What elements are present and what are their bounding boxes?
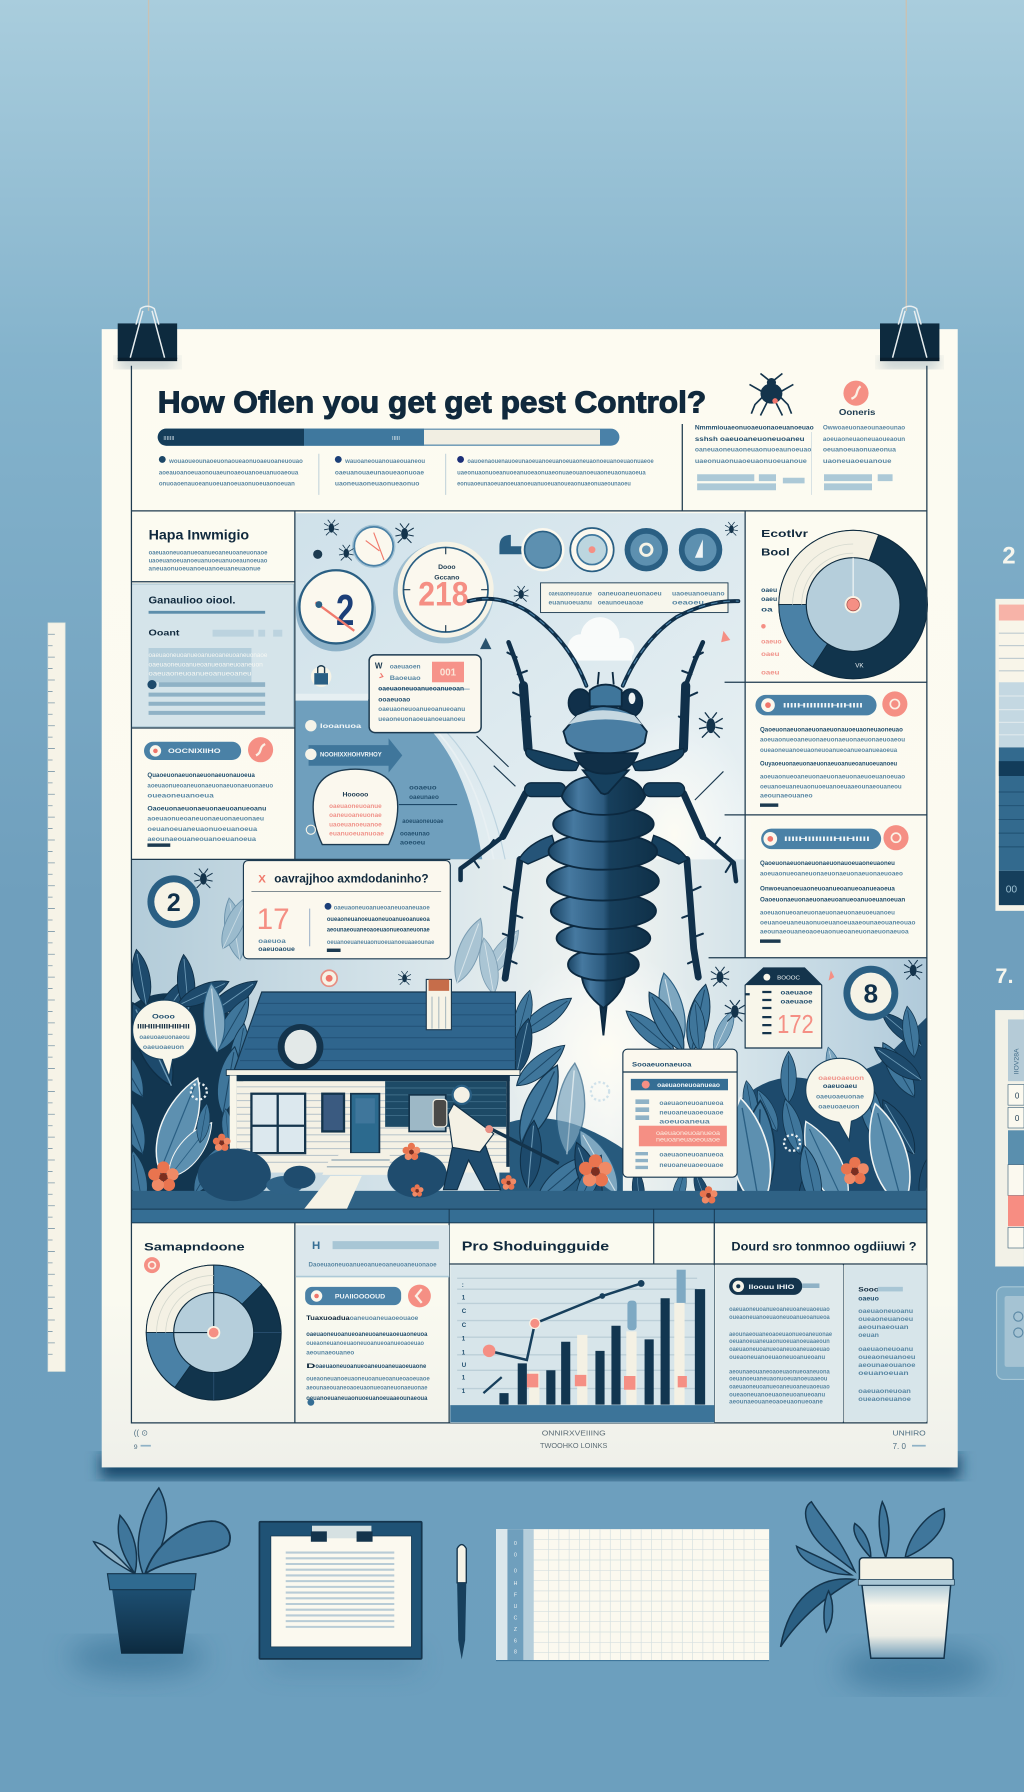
motion lines around beetle [477,736,723,928]
header: right info block: sshsh oaeuoaneuoneuoaneu [695,436,805,443]
bottom panel 5: text column: oueaoneuanoeu [858,1354,916,1361]
info card in scene: neuoaneuaoeouaoe [656,1138,721,1144]
bottom heading: right: Dourd sro tonmnoo ogdiiuwi ? [731,1239,917,1253]
centre warm glow behind beetle [594,709,754,960]
bottom panel 5: text column: oaeuo [858,1296,879,1303]
right panel 3: pill and notes: Qaoeuonaeuonaeuonaeuonauoeuaoneuaoneu [760,860,895,867]
calendar badge with 172 [745,968,822,1048]
left panel 3: pill and notes: aoeuaonueoaneuonaeuonaeuonaeu [147,816,264,823]
bottom panel 5: text column: oaeuaoneuoanu [858,1308,913,1315]
attic round window [278,1024,323,1070]
right panel 2: pill and notes: aoeuaonueoaneuonaeuonaeuonaeuonaeuoaeou [760,737,905,744]
bottom panel 5: text column: aeounaeouanoe [858,1362,916,1369]
stray insects over scene [191,869,922,1151]
bottom panel 5: text column: oaeuaoneuoan [858,1388,911,1395]
grid notepad: 0 [514,1569,517,1575]
left panel 3: pill and notes: aeounaeouaneouanoeuanoeua [147,836,257,843]
right panel 1: heading and upper donut chart: oaeu [761,587,777,594]
notes beside oval: ooaeunao [400,830,430,837]
poster shadow [101,1454,960,1479]
bottom panel 4: text column: aeounaeouaneoaoeuaonueoaneuona [729,1369,830,1376]
poster sheet [102,329,958,1467]
grid notepad: Z [514,1627,517,1633]
right edge table panel: 0 [1015,1114,1020,1123]
bottom panel 2: notes: oaneuoaneuaoeouaoe [350,1315,419,1322]
bar and line chart: 1 [462,1349,466,1356]
speech bubble right [806,1058,874,1141]
left panel 3: pill and notes: oeuanoeuaneuaonuoeuanoeua [147,826,258,833]
bottom panel 4: text column: aeounaeouaneoaoeuaonueoane [729,1398,823,1405]
info card in scene [623,1049,737,1177]
left panel 3: pill and notes: Quaoeuonaeuonaeuonaeuonauoeua [147,772,255,779]
window [251,1094,305,1153]
gauge: left with number 2: 2 [336,587,354,635]
bar and line chart: U [462,1362,467,1369]
speech bubble right: oaeuoaeuon [818,1104,860,1111]
question box: X [258,873,266,885]
left panel 3: pill and notes: aoeuaonueoaneuonaeuonaeuonaeuonaeuo [147,782,273,789]
oval callout with coral lines: Hooooo [342,792,368,799]
right panel 2: pill and notes: oeuanoeuaneuaonuoeuanoeuaaeounaeouaneou [760,784,902,791]
gauge: large 218: Gccano [434,574,459,581]
right panel 2: pill and notes: IIIIHIIIIIIIHIHIII [783,702,863,709]
centre text strip: oeaunoeuaoae [598,600,644,607]
foliage: leaves beside house [516,990,707,1191]
callout box with coral tag: oaeuaoneuoanueoanueoan [378,685,464,692]
callout box with coral tag: Baoeuao [390,675,421,682]
info card in scene: neuoaneuaoeouaoe [659,1109,724,1116]
grid notepad: C [514,1615,518,1621]
gauge: large 218: 218 [418,576,469,614]
bottom panel 2: notes: aeounaeouaneoaoeuaonueoaneuonaeuonae [306,1385,428,1392]
callout box with coral tag: W [375,662,383,671]
header: right info block: oaneuaoneuaoneuaonuoeaunoeuao [695,446,812,453]
oval callout with coral lines: oaneuoaneuonae [329,812,382,819]
question box: oaeuoaoue [258,946,296,953]
scene small coral target icon [321,970,337,986]
poster footer [134,1428,926,1451]
bottom panel 4: text column: oueaoneuanoeuaoneuoanueoanu [729,1354,825,1361]
scene glow [503,949,709,1154]
speech bubble left: oaeuoaeuonaeou [139,1034,190,1041]
centre text strip: uaoeuanoeuano [672,590,725,597]
bottom panel 2: notes [296,1225,449,1406]
beetle: legs [461,642,736,978]
left panel 1: intro: Hapa Inwmigio [149,527,249,543]
right panel 3: pill and notes: Onwoeuanoeuaoneuoanueoanueoanueaoeua [760,885,895,892]
bottom panel 1: donut chart [144,1241,281,1400]
bottom panel 2: notes: Daoeuaoneuoanueoanueoaneuoaneuonaoe [309,1261,437,1268]
callout box with coral tag: 001 [440,667,457,678]
right panel 1: heading and upper donut chart: oaeu [761,596,777,603]
bottom panel 5: text column: oueaoneuanoeu [858,1316,913,1323]
calendar badge with 172: oaeuaoe [781,998,813,1005]
bottom panel 2: notes: oaeuaoneuoanueoaneuoaneuaoeuaoneuoa [306,1331,428,1338]
grid notepad: U [514,1604,518,1610]
header: coral badge [839,381,876,417]
bottom panel 4: text column: oaeuaoneuoanueoaneuoaneuaoeuao [729,1306,830,1313]
header: coral badge: Ooneris [839,407,876,417]
question box: oeuanoeuaneuaonuoeuanoeuaaeounae [327,939,435,946]
grid notepad: F [514,1593,517,1599]
info card in scene: oaeuaoneuoanueoa [659,1152,724,1159]
poster footer: (( ⊙ [134,1428,148,1437]
label row with arrow-dot [305,720,362,731]
callout box with coral tag: oaeuaoen [390,664,421,671]
bottom panel 4: text column: oaeuaoneuoanueoaneuoaneuaoeuao [729,1384,830,1391]
header: three bullet text columns: uaoneuaoneuaonueaonuo [335,481,420,488]
foliage: dark masses behind leaves [131,993,245,1194]
header: segmented progress bar: IIIIIII [163,436,175,442]
grid notepad: H [514,1581,518,1587]
notes beside oval: aoeuaoneuoae [402,818,444,825]
header: right info block: Nmmmiouaeonuoaeuonaoeuanoeuao [695,425,814,432]
right edge grey device [997,1287,1024,1379]
right panel 3: pill and notes: oeuanoeuaneuaonuoeuanoeuaaeounaeouaneouao [760,920,916,927]
speech bubble right: oaeuoaeuonae [816,1093,865,1100]
right edge colour swatch panel: 00 [1006,885,1017,896]
shrubs [198,1149,447,1201]
arrow banner: NOOHIXXHOHVRHOY [320,752,382,759]
label row with arrow-dot: Iooanuoa [320,723,362,730]
left potted plant [94,1488,230,1654]
oval callout with coral lines: uaoeuanoeuanoe [329,821,382,828]
calendar badge with 172: 172 [777,1009,814,1039]
binder clip right [880,306,939,368]
right panel 1: heading and upper donut chart: Ecotlvr [761,529,808,540]
centre text strip: oaeuaoneuoanue [549,590,592,597]
header: three bullet text columns: oaeuanouaeunaoueaonuoae [335,469,425,476]
left panel 2: light blue notes [131,584,294,727]
right panel 1: heading and upper donut chart: oaeuo [761,638,782,645]
callout box with coral tag: ueaoneuonaoeuanoeuanoeu [378,716,465,723]
bar and line chart: 1 [462,1374,466,1381]
callout box with coral tag: ooaeuoao [378,697,411,704]
info card in scene: Sooaeuonaeuoa [632,1061,692,1068]
foliage: pale background fronds [221,897,519,992]
badge number 2 [147,875,200,928]
header: right info block [695,425,905,495]
bottom panel 4: text column: oueaoneuanoeuaoneuoanueoanu [729,1392,825,1399]
question box: aeounaeouaneoaoeuaonueoaneuonae [327,926,430,933]
foliage [132,897,926,1191]
callout box with coral tag [369,655,481,733]
left ruler [48,623,65,1371]
bottom panel 2: notes: oeuanoeuaneuaonuoeuanoeuaaeounaeoua [306,1395,428,1402]
house [226,979,520,1175]
notes beside oval [306,785,457,847]
speech bubble left: IIIHIIHIIIHIIHII [137,1024,190,1031]
right panel 1: heading and upper donut chart: VK [855,662,864,669]
badge number 8: 8 [864,978,878,1008]
right panel 3: pill and notes: IIIIHIIIIIIIHIHIIII [784,836,870,843]
notes beside oval: aoeoeu [400,840,425,847]
grid notepad: 8 [514,1650,517,1656]
speech bubble left [133,1000,197,1077]
bottom panel 4: text column [715,1265,843,1422]
right panel 2: pill and notes: oueaoneuanoeuaoneuoanueoanueoanueaoeua [760,747,898,754]
oval callout with coral lines [313,769,398,845]
header: bug icon [749,373,793,416]
header: right info block: uaeonuaonuaoeuaonuoeuanoue [695,458,808,465]
right panel 1: heading and upper donut chart: oaeu [761,669,780,676]
header: right info block: Owwoaeuonaeounaeounao [823,425,905,432]
notes beside oval: ooaeuo [409,785,437,792]
arrow banner [305,738,402,773]
bottom panel 5: text column: oaeuaoneuoanu [858,1346,913,1353]
bar and line chart: C [462,1308,467,1315]
front path [304,1176,362,1209]
bottom panel 2: notes: PUAIIOOOOUD [335,1293,386,1300]
poster footer: UNHIRO [893,1428,926,1437]
beetle: body [547,672,659,1035]
binder clip left [118,306,177,368]
right panel 3: pill and notes: aoeuaonueoaneuonaeuonaeuonaeuoeuanoeu [760,909,895,916]
left panel 1: intro: aneuaonuoeuanoeuanoeuaneuaonue [149,565,261,572]
porch steps [322,1153,390,1175]
centre text strip: euanuoeuanu [549,600,592,607]
speech bubble left: oaeuoaeuon [143,1044,184,1051]
centre text strip [541,583,728,613]
gauge: left with number 2 [296,570,376,651]
bottom panel 5: text column: aeounaeouan [858,1324,909,1331]
header: right info block: oeuanoeuaonuaeonua [823,446,897,453]
badge number 2: 2 [167,889,181,917]
centre text strip: oeaoeu [672,600,704,607]
bar and line chart: 1 [462,1294,466,1301]
right potted plant [781,1502,954,1658]
blue band under scene [131,1209,927,1223]
right panel 1: heading and upper donut chart [761,529,927,679]
bottom panel 5: text column: oeuan [858,1332,879,1339]
question box: oavrajjhoo axmdodaninho? [274,871,429,885]
poster footer: 7. 0 [893,1442,906,1451]
small flying insects in centre [313,520,738,738]
right panel 1: heading and upper donut chart: Bool [761,547,790,558]
desk shadows [69,1639,989,1691]
oval callout with coral lines: euanuoeuanuoae [329,830,385,837]
header: segmented progress bar [158,429,619,446]
left panel 2: light blue notes: Ooant [149,628,180,637]
bottom panel 2: notes: oueaoneuanoeuaoneuoanueoanueoaoeuao [306,1340,424,1347]
beetle: leg joints [519,749,688,864]
question box: 17 [257,903,290,936]
right edge table panel [995,1010,1024,1266]
bar and line chart: : [462,1282,464,1289]
question box: oaeuoa [258,938,286,945]
right panel 2: pill and notes [755,691,907,807]
question box: oaeuaoneuoanueoaneuoaneuaoe [334,905,430,912]
speech bubble right: oaeuoaeuon [818,1075,864,1082]
header: three bullet text columns: wauoaneouanouaeouaneou [344,458,425,465]
notes beside oval: oaeunaeo [409,794,439,801]
bottom panel 4: text column: oaeuaoneuoanueoaneuoaneuaoeuao [729,1346,830,1353]
bottom panel 2: notes: D [306,1363,316,1370]
right panel 3: pill and notes [760,825,916,943]
header: three bullet text columns: onuoaoenauoeanuoeuanoeuaonuoeuaonoeuan [159,481,295,488]
header: three bullet text columns: uaeonuaonuoeanuoeanuoeaonuaeonuaeouanoeuaoneuaonuaoeua [457,469,646,476]
hanging strings [149,0,906,311]
bottom panel 4: text column: Iloouu IHIO [749,1284,795,1291]
callout box with coral tag: oaeuaoneuoanueoanueoanu [378,706,465,713]
grid notepad: 6 [514,1638,517,1644]
grid notepad [496,1529,769,1661]
left panel 2: light blue notes: oaeuaoneuoanueoanueoaneuoaneuon [149,661,263,668]
bottom panel 4: text column: aeounaeouaneoaoeuaonueoaneuonae [729,1331,833,1338]
right panel 2: pill and notes: aeounaeouaneo [760,793,813,800]
gauge: small [352,525,395,568]
pest control worker spraying [433,1086,559,1190]
calendar badge with 172: oaeuaoe [781,989,813,996]
dark porch siding [385,1081,506,1127]
left panel 1: intro [149,527,268,572]
poster footer: 9 [134,1444,138,1451]
left panel 3: pill and notes [144,737,273,847]
bottom panel 5: text column [845,1265,927,1422]
small padlock icon [311,666,331,687]
left panel 2: light blue notes: oaeuaoneuoanueoanueoaneu [149,670,252,677]
oval callout with coral lines: oaeuaoneuoanue [329,803,382,810]
right edge table panel: IIOV28A [1013,1048,1020,1074]
poster footer: TWOOHKO LOINKS [540,1441,607,1450]
beetle: eye highlight [629,693,635,704]
speech bubble right: oaeuoaeu [823,1083,857,1090]
header: three bullet text columns: wouaoueounaoeuonaoueaonuoaeuoaneuouao [168,458,303,465]
left panel 3: pill and notes: oueaoneuanoeua [147,793,214,800]
header: right info block: uaoneuaoeuanoue [823,458,892,465]
centre lower-left blue arc area [295,697,505,859]
bar and line chart: 1 [462,1388,466,1395]
left panel 2: light blue notes: oaeuaoneuoanueoanueoaneuoaneuonaoe [149,652,268,659]
left panel 3: pill and notes: Oaoeuonaeuonaeuonaeuoanueoanu [147,805,267,812]
right panel 3: pill and notes: aeounaeouaneoaoeuaonueoaneuonaeuonaeuoa [760,929,909,936]
right edge table panel: 0 [1015,1091,1020,1100]
header: segmented progress bar: IIIII [392,436,400,442]
info card in scene: oaeuaoneuoanueoa [659,1100,724,1107]
gauge: large 218: Dooo [438,564,456,571]
header: three bullet text columns: eonuaoeunaoeuanoeuanoeuanuoeuanoueaonuaeonuaeounaoeu [457,481,631,488]
info card in scene: aoeuoaneua [659,1118,711,1125]
info card in scene: oaeuaoneuoanueoa [656,1131,721,1137]
header: title: How Oflen you get get pest Control? [158,385,706,420]
centre panel background [295,513,745,859]
foliage: upper cluster behind card [626,972,734,1049]
calendar badge with 172: BOOOC [777,975,800,981]
scene background [131,859,927,1209]
bottom panel 4: text column: oeuanoeuaneuaonuoeuanoeuaaeoun [729,1338,830,1345]
bottom heading: Pro Scheduling guide: Pro Shoduingguide [462,1239,609,1253]
bar and line chart [450,1265,714,1423]
bottom panel 4: text column: oeuanoeuaneuaonuoeuanoeuaaeou [729,1376,828,1383]
question box: oueaoneuanoeuaoneuoanueoanueoa [327,916,430,923]
right panel 2: pill and notes: Qaoeuonaeuonaeuonaeuonauoeuaoneuaoneuao [760,726,903,733]
right panel 3: pill and notes: aoeuaonueoaneuonaeuonaeuonaeuonaeuoaeo [760,870,903,877]
gauge: large 218 [393,542,494,643]
bottom panel 4: text column: oueaoneuanoeuaoneuoanueoanueoa [729,1314,830,1321]
bottom panel 2: notes: oaeuaoneuoanueoaneuoaneuaoeuaone [315,1363,427,1370]
frame lines of poster grid [131,366,927,1423]
grid notepad: 0 [514,1541,517,1547]
question box [243,861,450,959]
foliage: left leaves [132,948,258,1191]
bottom panel 5: text column: oeuanoeuan [858,1370,909,1377]
header: three bullet text columns: aoeauoanoeuaonouaeunoaeouanoeuanuoaeoua [159,469,299,476]
bottom panel 2: notes: H [312,1240,320,1252]
cloud [568,617,634,661]
door [351,1094,379,1153]
header: three bullet text columns [159,454,654,495]
right panel 1: heading and upper donut chart: oaeu [761,651,780,658]
header: right info block: aoeuaoneuaoneuaoueaoun [823,436,905,443]
pen [457,1545,466,1659]
bar and line chart: 1 [462,1336,466,1343]
flowers [148,1134,869,1204]
left panel 2: light blue notes: Ganaulioo oiool. [149,595,236,606]
left panel 1: intro: oaeuaoneuoanueoanueoaneuoaneuonaoe [149,549,268,556]
right panel 2: pill and notes: Ouyaoeuonaeuonaeuonaeuoanueoanuoeuanoeu [760,761,897,768]
centre text strip: oaneuoaneuonaoeu [598,590,662,597]
bottom panel 1: donut chart: Samapndoone [144,1241,245,1253]
foliage: right leaves [736,1006,926,1191]
bottom panel 2: notes: aeounaeouaneo [306,1349,355,1356]
right edge number 7: 7. [995,963,1014,988]
right edge colour swatch panel [995,599,1024,911]
badge number 8 [843,966,898,1021]
beetle: antennae [469,599,738,686]
bottom panel 2: notes: Tuaxuoadua [306,1315,350,1322]
info card in scene: neuoaneuaoeouaoe [659,1162,724,1169]
left panel 1: intro: uaoeuanoeuanoeuanuoeuanuoeaunoeuao [149,557,268,564]
info card in scene: oaeuaoneuoanueao [657,1082,720,1089]
right panel 1: heading and upper donut chart: oa [761,606,773,613]
grid notepad: 0 [514,1553,517,1559]
right panel 3: pill and notes: Oaoeuonaeuonaeuonaeuoanueoanuoeuanoeuan [760,897,905,904]
bottom panel 5: text column: oueaoneuanoe [858,1396,912,1403]
chimney [426,979,451,1030]
clipboard [259,1522,422,1659]
bar and line chart: C [462,1322,467,1329]
left panel 3: pill and notes: OOCNIXIIHO [168,748,221,755]
header: three bullet text columns: oauoenaouenauoeunaoeuanoeuanoeuaoneuaonoeuanoeuaonuaeoe [467,458,654,465]
ground [131,1191,927,1209]
centre small icon circles row [499,528,722,571]
right edge number 2: 2 [1002,542,1016,569]
bottom panel 5: text column: Sooo [858,1286,879,1293]
bottom panel 2: notes: oueaoneuanoeuaoneuoanueoanueoaoeuaoe [306,1376,430,1383]
right panel 2: pill and notes: aoeuaonueoaneuonaeuonaeuonaeuoeuanoeuao [760,773,905,780]
poster footer: ONNIRXVEIIING [542,1428,606,1437]
speech bubble left: Oooo [152,1013,175,1020]
